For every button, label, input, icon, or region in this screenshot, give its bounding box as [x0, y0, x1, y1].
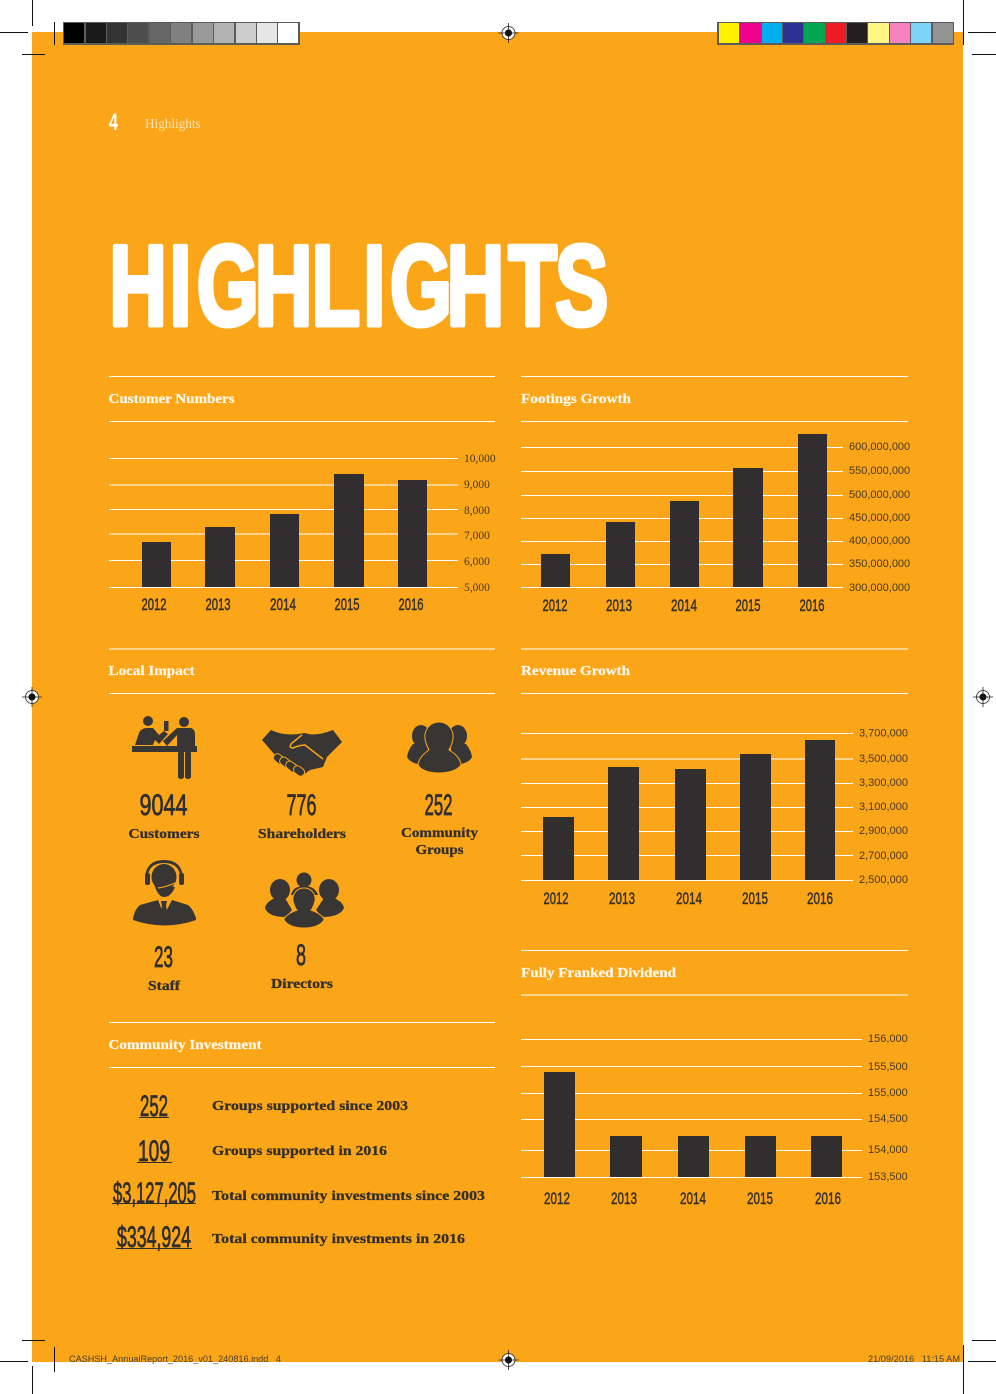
bar chart: customer numbers: 6,000	[464, 556, 490, 568]
big number: shareholders: 776	[286, 789, 316, 822]
process colour bar	[717, 22, 954, 45]
bar chart: revenue growth: 3,500,000	[859, 753, 908, 765]
grey colour bar	[63, 22, 300, 45]
stat row: total since 2003: $3,127,205	[113, 1177, 196, 1210]
bar chart: fully franked dividend: 154,500	[868, 1113, 908, 1125]
bar chart: revenue growth: 2,900,000	[859, 825, 908, 837]
stat row: groups since 2003	[139, 1090, 408, 1123]
bar chart: fully franked dividend: 156,000	[868, 1033, 908, 1045]
panel: customer numbers	[108, 376, 496, 614]
bar chart: customer numbers: 2014	[270, 595, 296, 614]
bar chart: footings growth: 300,000,000	[849, 582, 910, 594]
big number: directors: 8	[296, 939, 306, 972]
bar chart: fully franked dividend: 2013	[611, 1189, 637, 1208]
bar chart: fully franked dividend: 2016	[815, 1189, 841, 1208]
bar chart: revenue growth: 2016	[807, 889, 833, 908]
panel: fully franked dividend	[521, 950, 908, 1208]
bar chart: customer numbers: 8,000	[464, 505, 490, 517]
bar chart: customer numbers	[109, 453, 496, 614]
bar chart: fully franked dividend	[521, 1033, 908, 1208]
registration mark bottom	[498, 1350, 518, 1370]
stat row: groups since 2003: 252	[140, 1090, 168, 1123]
icon: community group	[407, 722, 472, 773]
stat row: total since 2003: Total community investments since 2003	[212, 1189, 485, 1204]
bar chart: footings growth: 2012	[542, 596, 568, 615]
label: staff: Staff	[148, 979, 180, 994]
panel: local impact: Groups	[416, 843, 464, 858]
bar chart: footings growth: 500,000,000	[849, 489, 910, 501]
heading: local impact: Local Impact	[108, 663, 195, 678]
panel: footings growth	[521, 376, 910, 615]
bar chart: revenue growth: 2015	[742, 889, 768, 908]
bar chart: footings growth: 2013	[606, 596, 632, 615]
bar chart: customer numbers: 2013	[206, 595, 230, 614]
bar chart: fully franked dividend: 155,000	[868, 1087, 908, 1099]
bar chart: revenue growth: 2013	[609, 889, 635, 908]
bar chart: customer numbers: 9,000	[464, 479, 490, 491]
panel: local impact	[108, 649, 495, 994]
footer date: 21/09/2016 11:15 AM	[868, 1354, 960, 1364]
panel: revenue growth	[521, 649, 908, 908]
label: community groups: Community	[401, 826, 478, 841]
bar chart: footings growth: 550,000,000	[849, 465, 910, 477]
label: shareholders: Shareholders	[258, 827, 347, 842]
title: HIGHLIGHTS	[109, 222, 608, 349]
stat row: total in 2016: $334,924	[117, 1221, 191, 1254]
bar chart: revenue growth: 3,700,000	[859, 728, 908, 740]
bar chart: revenue growth: 2012	[544, 889, 568, 908]
bar chart: fully franked dividend: 155,500	[868, 1061, 908, 1073]
stat row: total in 2016	[116, 1221, 465, 1254]
stat row: groups in 2016	[137, 1135, 387, 1168]
stat row: groups in 2016: Groups supported in 2016	[212, 1144, 387, 1159]
label: customers: Customers	[128, 827, 200, 842]
bar chart: revenue growth	[521, 728, 908, 908]
big number: staff: 23	[154, 941, 173, 974]
icon: directors group	[265, 872, 344, 928]
bar chart: footings growth: 350,000,000	[849, 558, 910, 570]
footer slug: CASHSH_AnnualReport_2016_v01_240816.indd 4	[69, 1354, 281, 1364]
panel: community investment	[108, 1022, 495, 1254]
icon: customers at counter	[132, 716, 197, 779]
bar chart: revenue growth: 3,100,000	[859, 801, 908, 813]
stat row: total since 2003	[112, 1177, 485, 1210]
heading: fully franked dividend: Fully Franked Dividend	[521, 965, 677, 980]
bar chart: footings growth: 2015	[736, 596, 760, 615]
bar chart: customer numbers: 10,000	[464, 453, 496, 465]
bar chart: footings growth: 2016	[800, 596, 824, 615]
heading: revenue growth: Revenue Growth	[521, 663, 631, 678]
icon: handshake	[262, 730, 342, 778]
page number: 4	[109, 109, 118, 136]
registration mark top	[498, 23, 518, 43]
bar chart: fully franked dividend: 154,000	[868, 1144, 908, 1156]
bar chart: revenue growth: 3,300,000	[859, 777, 908, 789]
icon: staff with headset	[133, 860, 196, 926]
label: directors: Directors	[271, 977, 334, 992]
bar chart: customer numbers: 2016	[398, 595, 424, 614]
stat row: total in 2016: Total community investments in 2016	[212, 1232, 465, 1247]
bar chart: footings growth: 2014	[671, 596, 697, 615]
bar chart: customer numbers: 2012	[142, 595, 166, 614]
bar chart: footings growth: 400,000,000	[849, 535, 910, 547]
bar chart: footings growth	[521, 434, 910, 615]
stat row: groups in 2016: 109	[138, 1135, 170, 1168]
bar chart: footings growth: 450,000,000	[849, 512, 910, 524]
bar chart: customer numbers: 2015	[334, 595, 360, 614]
big number: community groups: 252	[424, 789, 452, 822]
heading: footings growth: Footings Growth	[521, 391, 632, 406]
bar chart: revenue growth: 2014	[676, 889, 702, 908]
registration mark right	[973, 687, 993, 707]
bar chart: customer numbers: 7,000	[464, 530, 490, 542]
bar chart: fully franked dividend: 2014	[680, 1189, 706, 1208]
stat row: groups since 2003: Groups supported since 2003	[212, 1099, 408, 1114]
heading: community investment: Community Investment	[108, 1037, 262, 1052]
bar chart: customer numbers: 5,000	[464, 582, 490, 594]
big number: customers: 9044	[140, 789, 188, 822]
bar chart: fully franked dividend: 2015	[747, 1189, 773, 1208]
bar chart: fully franked dividend: 2012	[544, 1189, 570, 1208]
bar chart: revenue growth: 2,700,000	[859, 850, 908, 862]
running header: Highlights	[145, 116, 201, 131]
bar chart: fully franked dividend: 153,500	[868, 1171, 908, 1183]
bar chart: footings growth: 600,000,000	[849, 441, 910, 453]
registration mark left	[22, 687, 42, 707]
heading: customer numbers: Customer Numbers	[108, 391, 234, 406]
bar chart: revenue growth: 2,500,000	[859, 874, 908, 886]
